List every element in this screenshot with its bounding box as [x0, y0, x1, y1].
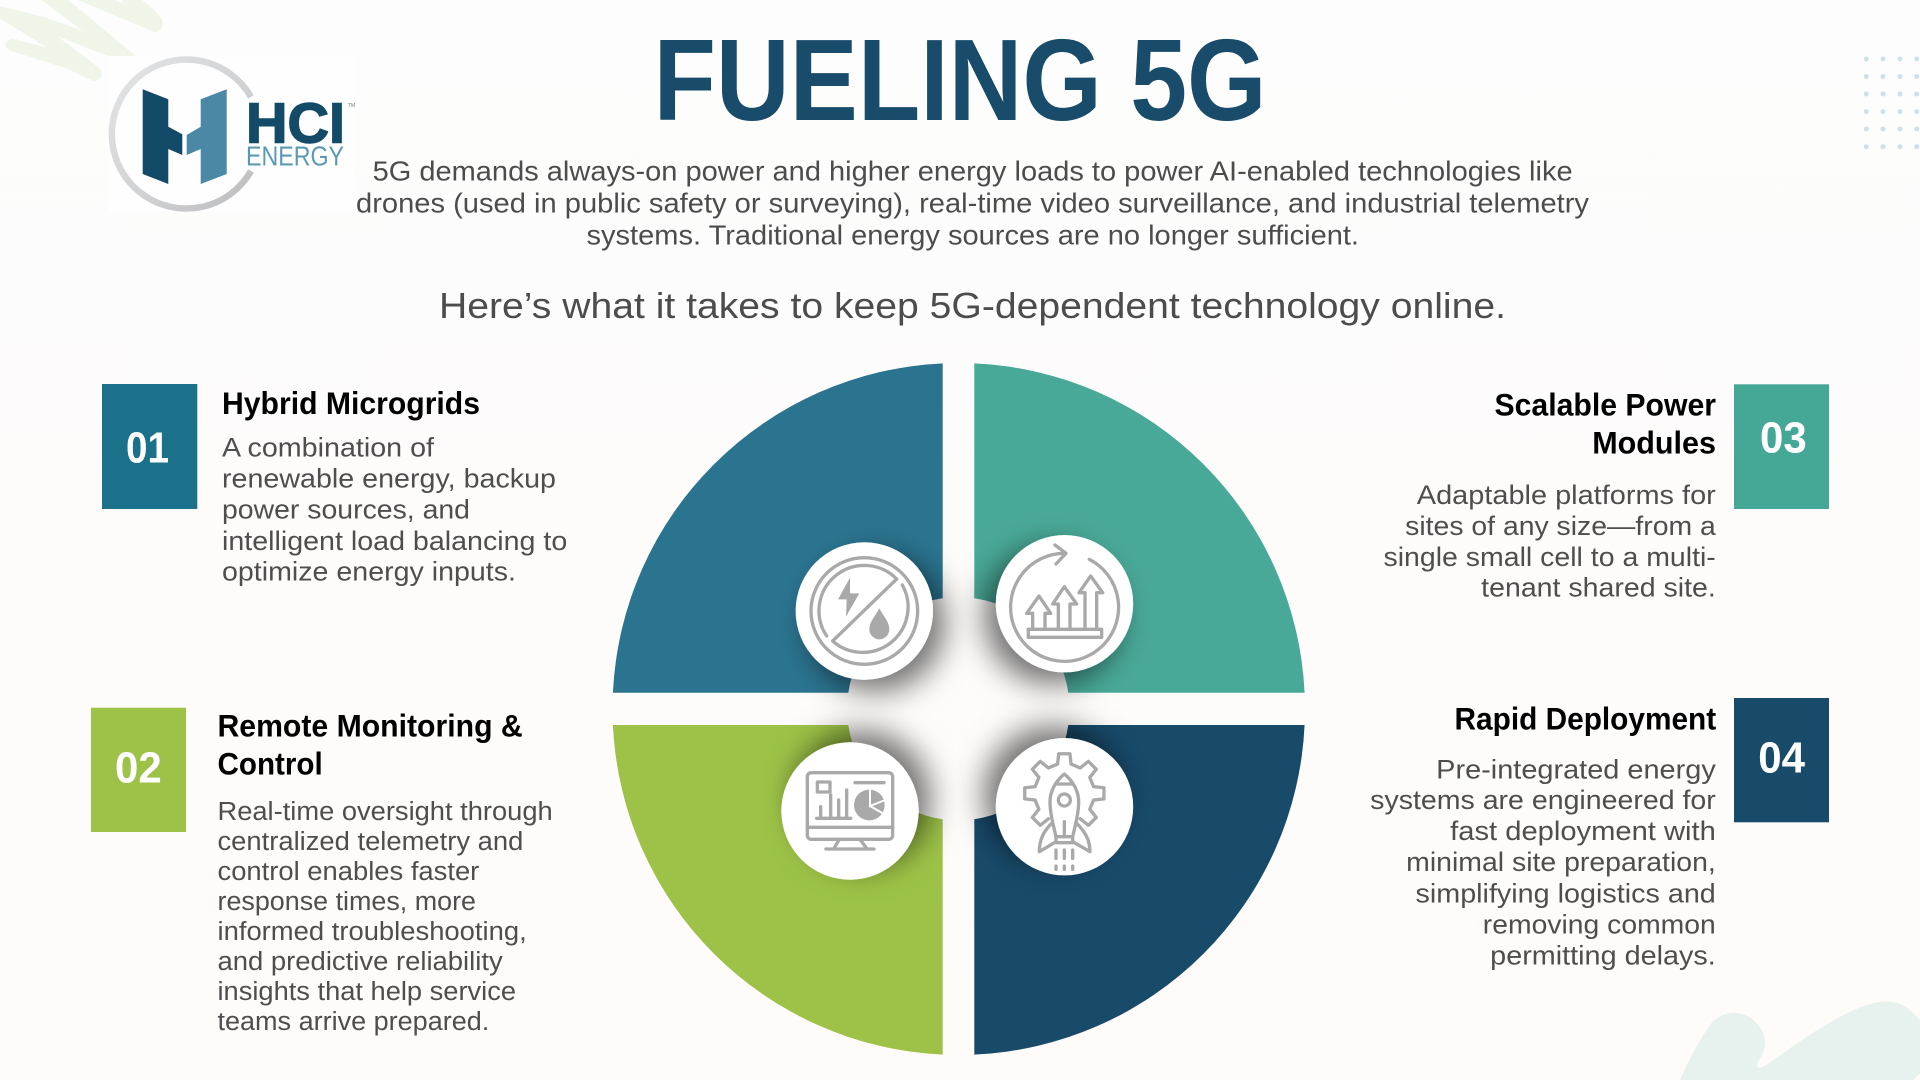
- body text: informed troubleshooting,: [218, 918, 527, 946]
- body text: [218, 798, 553, 1036]
- body text: Pre-integrated energy: [1436, 754, 1717, 784]
- body text: intelligent load balancing to: [222, 526, 567, 556]
- quadrant: top right: [974, 363, 1305, 693]
- number badge 01: [102, 384, 197, 509]
- icon: monitoring dashboard: [781, 742, 919, 880]
- body text: insights that help service: [218, 978, 516, 1006]
- panel: 03 Scalable Power Modules: [1384, 384, 1829, 603]
- number badge 03: [1734, 384, 1829, 509]
- body text: sites of any size—from a: [1405, 511, 1716, 541]
- body text: control enables faster: [218, 858, 480, 886]
- body text: optimize energy inputs.: [222, 557, 516, 587]
- heading: Modules: [1592, 425, 1716, 461]
- body text: and predictive reliability: [218, 948, 503, 976]
- intro paragraph: systems. Traditional energy sources are no longer sufficient.: [586, 219, 1359, 250]
- body text: systems are engineered for: [1370, 785, 1716, 815]
- body text: fast deployment with: [1450, 816, 1716, 846]
- body text: Adaptable platforms for: [1417, 480, 1716, 510]
- intro paragraph: 5G demands always-on power and higher energy loads to power AI-enabled technologies like: [373, 156, 1573, 187]
- number badge 03: 03: [1760, 413, 1807, 462]
- heading: Rapid Deployment: [1454, 700, 1717, 736]
- number badge 01: 01: [126, 424, 169, 473]
- intro paragraph: [356, 156, 1589, 250]
- quadrant: bottom right: [974, 725, 1305, 1055]
- panel: 02 Remote Monitoring and Control: [91, 708, 553, 1036]
- icon: no lightning or water: [796, 542, 933, 680]
- decoration: bottom right leaf: [1680, 1001, 1920, 1080]
- icon: scaling arrows: [996, 535, 1133, 672]
- body text: tenant shared site.: [1481, 573, 1716, 603]
- body text: renewable energy, backup: [222, 464, 556, 494]
- body text: permitting delays.: [1490, 940, 1716, 970]
- body text: single small cell to a multi-: [1384, 542, 1716, 572]
- intro paragraph: drones (used in public safety or surveying), real-time video surveillance, and industrial telemetry: [356, 188, 1589, 219]
- body text: A combination of: [222, 433, 435, 463]
- title: FUELING 5G: [654, 15, 1266, 145]
- body text: response times, more: [218, 888, 476, 916]
- decoration: leaf scribble: [0, 0, 163, 81]
- quadrant: bottom left: [613, 725, 943, 1055]
- circular diagram: [613, 363, 1305, 1055]
- body text: [222, 433, 567, 587]
- heading: Hybrid Microgrids: [222, 385, 480, 421]
- panel: 04 Rapid Deployment: [1370, 698, 1829, 970]
- logo: HCI Energy: TM: [348, 103, 355, 109]
- logo: HCI Energy: HCI: [246, 92, 345, 156]
- heading: [1494, 387, 1716, 461]
- logo: HCI Energy: [108, 56, 355, 212]
- number badge 04: [1734, 698, 1829, 822]
- body text: removing common: [1483, 909, 1716, 939]
- subheading: Here’s what it takes to keep 5G-dependent technology online.: [439, 285, 1506, 326]
- body text: centralized telemetry and: [218, 828, 523, 856]
- quadrant: top left: [613, 363, 943, 693]
- body text: [1384, 480, 1716, 603]
- heading: [218, 708, 523, 781]
- heading: Remote Monitoring &: [218, 708, 523, 744]
- logo: HCI Energy: ENERGY: [246, 140, 344, 172]
- heading: Scalable Power: [1494, 387, 1716, 423]
- icon: rocket and gear: [996, 738, 1133, 875]
- body text: teams arrive prepared.: [218, 1008, 489, 1036]
- body text: Real-time oversight through: [218, 798, 553, 826]
- decoration: dot grid: [1864, 56, 1919, 149]
- number badge 02: [91, 708, 186, 832]
- body text: simplifying logistics and: [1416, 878, 1716, 908]
- body text: power sources, and: [222, 494, 470, 524]
- body text: [1370, 754, 1717, 970]
- number badge 04: 04: [1758, 734, 1805, 783]
- number badge 02: 02: [115, 744, 162, 793]
- heading: Control: [218, 745, 323, 781]
- panel: 01 Hybrid Microgrids: [102, 384, 567, 587]
- body text: minimal site preparation,: [1406, 847, 1716, 877]
